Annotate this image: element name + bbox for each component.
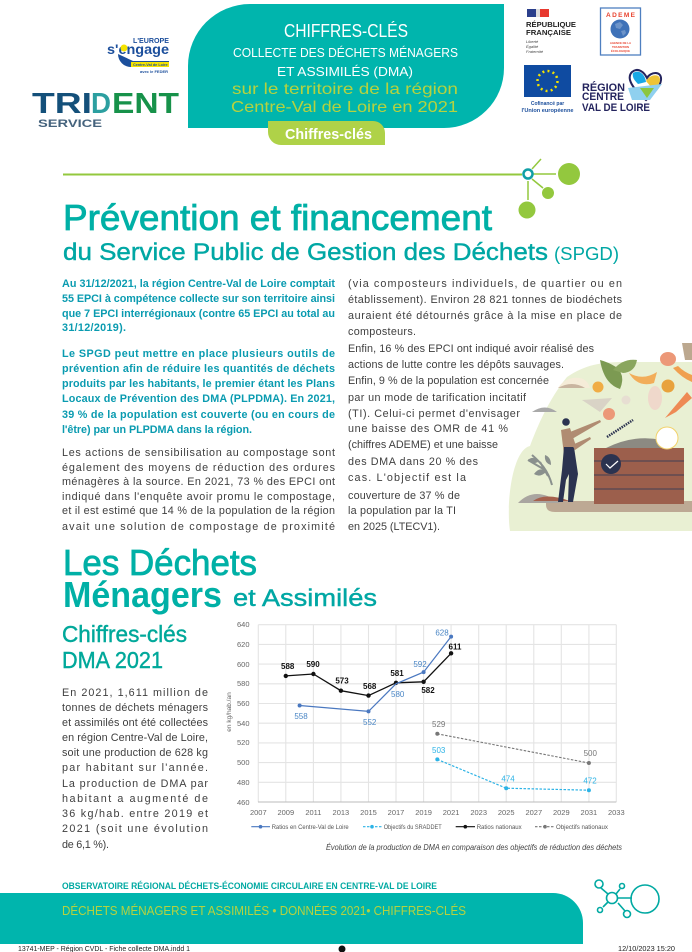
panel: header title — [188, 4, 504, 145]
y axis: en kg/hab./an — [226, 692, 233, 732]
logo: Trident Service — [32, 88, 179, 130]
compost paragraph: et il est estimé que 14 % de la population de la région — [62, 505, 335, 517]
series: objectifs nationaux — [432, 720, 598, 765]
text column: right: des DMA dans 20 % des — [348, 456, 479, 468]
compost paragraph: indiqué dans l'enquête avoir promu le compostage, — [62, 491, 335, 503]
text column: right: auraient été détournés grâce à la mise en place de — [348, 310, 622, 322]
y axis: 480 — [237, 778, 250, 787]
tag: Chiffres-clés — [268, 121, 385, 145]
text block: DMA 2021: 2021 (soit une évolution — [62, 823, 208, 835]
text column: right: composteurs. — [348, 326, 416, 338]
footer band: DÉCHETS MÉNAGERS ET ASSIMILÉS • DONNÉES 2021• CHIFFRES-CLÉS — [62, 903, 466, 918]
heading: Chiffres-clés DMA 2021: Chiffres-clés — [62, 621, 187, 647]
text block: DMA 2021: par habitant sur l'année. — [62, 762, 208, 774]
logo: République Française: Fraternité — [526, 49, 544, 54]
legend — [251, 824, 609, 831]
logo: ADEME — [600, 8, 640, 55]
x axis: 2023 — [470, 808, 487, 817]
legend: Objectifs du SRADDET — [384, 824, 442, 831]
text block: DMA 2021: de 6,1 %). — [62, 839, 109, 851]
logo: Trident Service: D — [91, 88, 111, 120]
text column: right: par un mode de tarification incitatif — [348, 392, 527, 404]
header heading lines: COLLECTE DES DÉCHETS MÉNAGERS — [233, 45, 458, 60]
logo: République Française: FRANÇAISE — [526, 28, 571, 37]
title: Prévention et financement: Prévention et financement — [63, 197, 492, 238]
footer band — [0, 893, 583, 944]
text column: right: couverture de 37 % de — [348, 490, 460, 502]
header heading lines — [231, 21, 458, 116]
text column: right: établissement). Environ 28 821 tonnes de biodéchets — [348, 294, 623, 306]
logo: Région Centre-Val de Loire: RÉGION — [582, 81, 625, 94]
logo: Trident Service: ENT — [112, 88, 179, 120]
logo: Union européenne: Cofinancé par — [531, 101, 564, 107]
text block: DMA 2021: soit une production de 628 kg — [62, 747, 208, 759]
heading: Chiffres-clés DMA 2021: DMA 2021 — [62, 647, 163, 673]
text block: DMA 2021: et assimilés ont été collectées — [62, 717, 209, 729]
illustration: composting — [509, 343, 692, 531]
logo: ADEME: TRANSITION — [612, 45, 629, 49]
heading: Chiffres-clés DMA 2021 — [62, 621, 187, 673]
subtitle: SPGD: (SPGD) — [554, 244, 619, 264]
text column: right: (via composteurs individuels, de quartier ou en — [348, 278, 622, 290]
title: Les Déchets Ménagers et Assimilés: Les Déchets — [63, 542, 257, 583]
series: ratios Centre-Val de Loire — [294, 628, 453, 727]
header heading lines: CHIFFRES-CLÉS — [284, 21, 408, 41]
x axis: 2021 — [443, 808, 459, 817]
x axis: 2009 — [277, 808, 294, 817]
compost paragraph: avait une solution de compostage de proximité — [62, 521, 335, 533]
SPGD paragraph: produits par les habitants, le premier étant les Plans — [62, 378, 335, 390]
x axis — [250, 808, 625, 817]
compost paragraph: également des moyens de réduction des ordures — [62, 462, 336, 474]
title: Les Déchets Ménagers et Assimilés: Ménagers — [63, 574, 222, 615]
x axis: 2011 — [305, 808, 321, 817]
title: Les Déchets Ménagers et Assimilés: et Assimilés — [233, 585, 377, 612]
compost paragraph: ménagères à la source. En 2021, 73 % des EPCI ont — [62, 476, 335, 488]
logo: L'Europe s'engage: en région — [142, 57, 157, 61]
logo: République Française: Liberté — [526, 39, 539, 44]
logo: Région Centre-Val de Loire: CENTRE — [582, 91, 624, 103]
series: ratios nationaux: 611 — [449, 642, 462, 652]
series: ratios Centre-Val de Loire: 592 — [413, 660, 427, 669]
series: ratios Centre-Val de Loire: 552 — [363, 718, 377, 727]
series: ratios nationaux: 581 — [390, 669, 404, 678]
legend: Ratios en Centre-Val de Loire — [272, 824, 349, 831]
text column: right: (chiffres ADEME) et une baisse — [348, 439, 498, 451]
header heading lines: Centre-Val de Loire en 2021 — [231, 99, 458, 116]
SPGD paragraph: 39 % de la population est couverte (ou en cours de — [62, 409, 335, 421]
intro paragraph: 31/12/2019). — [62, 322, 126, 334]
text column: right: actions de lutte contre les dépôts sauvages. — [348, 359, 564, 371]
logo: République Française — [526, 9, 576, 54]
logo: L'Europe s'engage: Centre-Val de Loire — [133, 63, 168, 67]
series: ratios Centre-Val de Loire: 558 — [294, 712, 308, 721]
SPGD paragraph: Le SPGD peut mettre en place plusieurs outils de — [62, 348, 335, 360]
text column: right: une baisse des OMR de 41 % — [348, 423, 508, 435]
text column: right: cas. L'objectif est la — [348, 472, 466, 484]
x axis: 2017 — [388, 808, 404, 817]
header heading lines: ET ASSIMILÉS (DMA) — [277, 64, 413, 79]
x axis: 2031 — [581, 808, 597, 817]
compost waste — [582, 343, 692, 449]
text block: DMA 2021: 36 kg/hab. entre 2019 et — [62, 808, 208, 820]
text block: DMA 2021: en région Centre-Val de Loire, — [62, 732, 208, 744]
y axis: 620 — [237, 640, 250, 649]
series: ratios nationaux: 588 — [281, 662, 295, 671]
series: ratios nationaux: 573 — [335, 676, 349, 686]
series: ratios nationaux — [281, 642, 462, 698]
chart caption: Évolution de la production de DMA en comparaison des objectifs de réduction des déchets — [326, 843, 622, 852]
y axis: 580 — [237, 679, 250, 688]
logo: République Française: RÉPUBLIQUE — [526, 20, 576, 29]
text block: DMA 2021: tonnes de déchets ménagers — [62, 702, 209, 714]
series: objectifs nationaux: 529 — [432, 720, 446, 729]
divider with network icon — [63, 159, 580, 218]
y axis: 500 — [237, 758, 250, 767]
y axis: 540 — [237, 719, 250, 728]
intro paragraph: Au 31/12/2021, la région Centre-Val de Loire comptait — [62, 278, 335, 290]
logo: République Française: Égalité — [526, 44, 539, 49]
title: Les Déchets Ménagers et Assimilés — [63, 542, 377, 615]
man figure — [558, 418, 601, 502]
SPGD paragraph: prévention afin de réduire les quantités de déchets — [62, 363, 335, 375]
logo: ADEME: AGENCE DE LA — [610, 41, 631, 45]
y axis: 520 — [237, 738, 250, 747]
print slug — [18, 946, 675, 952]
text column: right: Enfin, 16 % des EPCI ont indiqué avoir réalisé des — [348, 343, 595, 355]
series: ratios nationaux: 582 — [421, 686, 435, 695]
x axis: 2019 — [415, 808, 432, 817]
series: objectifs nationaux: 500 — [584, 749, 598, 758]
x axis: 2025 — [498, 808, 515, 817]
y axis: 460 — [237, 798, 250, 807]
text block: DMA 2021: habitant a augmenté de — [62, 793, 208, 805]
series: ratios Centre-Val de Loire: 628 — [435, 628, 449, 638]
x axis: 2007 — [250, 808, 267, 817]
x axis: 2015 — [360, 808, 377, 817]
line chart: DMA production — [226, 620, 625, 831]
logo: L'Europe s'engage — [107, 36, 169, 74]
text column: right: (TI). Celui-ci permet d'envisager — [348, 408, 520, 420]
logo: L'Europe s'engage: avec le FEDER — [140, 69, 168, 74]
text column: right: la population par la TI — [348, 505, 456, 517]
x axis: 2033 — [608, 808, 625, 817]
series: objectifs du SRADDET: 503 — [432, 746, 446, 755]
logo: L'Europe s'engage: s'engage — [107, 41, 169, 57]
logo: Région Centre-Val de Loire — [582, 70, 662, 114]
subtitle: SPGD: du Service Public de Gestion des Déchets — [63, 239, 548, 266]
compost box — [594, 448, 684, 504]
y axis: 640 — [237, 620, 250, 629]
series: objectifs du SRADDET — [432, 746, 597, 792]
icon: network — [595, 880, 659, 918]
series: ratios nationaux: 568 — [363, 682, 377, 691]
x axis: 2027 — [525, 808, 542, 817]
text block: DMA 2021: La production de DMA par — [62, 778, 208, 790]
compost paragraph: Les actions de sensibilisation au compostage sont — [62, 447, 335, 459]
text block: DMA 2021: En 2021, 1,611 million de — [62, 687, 208, 699]
SPGD paragraph: l'être) par un PLPDMA dans la région. — [62, 424, 252, 436]
logo: ADEME: ADEME — [606, 12, 636, 19]
text column: right: Enfin, 9 % de la population est concernée — [348, 375, 549, 387]
logo: Région Centre-Val de Loire: VAL DE LOIRE — [582, 102, 650, 114]
y axis: 560 — [237, 699, 250, 708]
logo: Trident Service: SERVICE — [38, 118, 102, 130]
series: objectifs du SRADDET: 474 — [501, 774, 515, 784]
SPGD paragraph: Locaux de Prévention des DMA (PLPDMA). En 2021, — [62, 393, 335, 405]
logo: Union européenne: l'Union européenne — [522, 108, 574, 114]
logo: L'Europe s'engage: L'EUROPE — [133, 36, 169, 45]
text column: right: en 2025 (LTECV1). — [348, 521, 440, 533]
series: objectifs du SRADDET: 472 — [583, 776, 597, 786]
header heading lines: sur le territoire de la région — [232, 81, 458, 98]
intro paragraph: 55 EPCI à compétence collecte sur son territoire ainsi — [62, 293, 335, 305]
logo: Trident Service: TRI — [32, 88, 92, 120]
y axis — [226, 620, 250, 807]
y axis: 600 — [237, 660, 250, 669]
tag: Chiffres-clés: Chiffres-clés — [285, 126, 372, 143]
text column: left — [62, 278, 336, 533]
series: ratios nationaux: 590 — [306, 660, 320, 669]
series: ratios Centre-Val de Loire: 580 — [391, 690, 405, 699]
logo: ADEME: ÉCOLOGIQUE — [611, 48, 630, 53]
legend: Ratios nationaux — [477, 824, 522, 831]
intro paragraph: que 7 EPCI interrégionaux (contre 65 EPCI au total au — [62, 308, 335, 320]
x axis: 2013 — [333, 808, 349, 817]
x axis: 2029 — [553, 808, 570, 817]
footer label: observatoire: OBSERVATOIRE RÉGIONAL DÉCHETS-ÉCONOMIE CIRCULAIRE EN CENTRE-VAL DE LOIRE — [62, 881, 437, 892]
legend: Objectifs nationaux — [556, 824, 609, 831]
logo: Union européenne — [522, 65, 574, 114]
